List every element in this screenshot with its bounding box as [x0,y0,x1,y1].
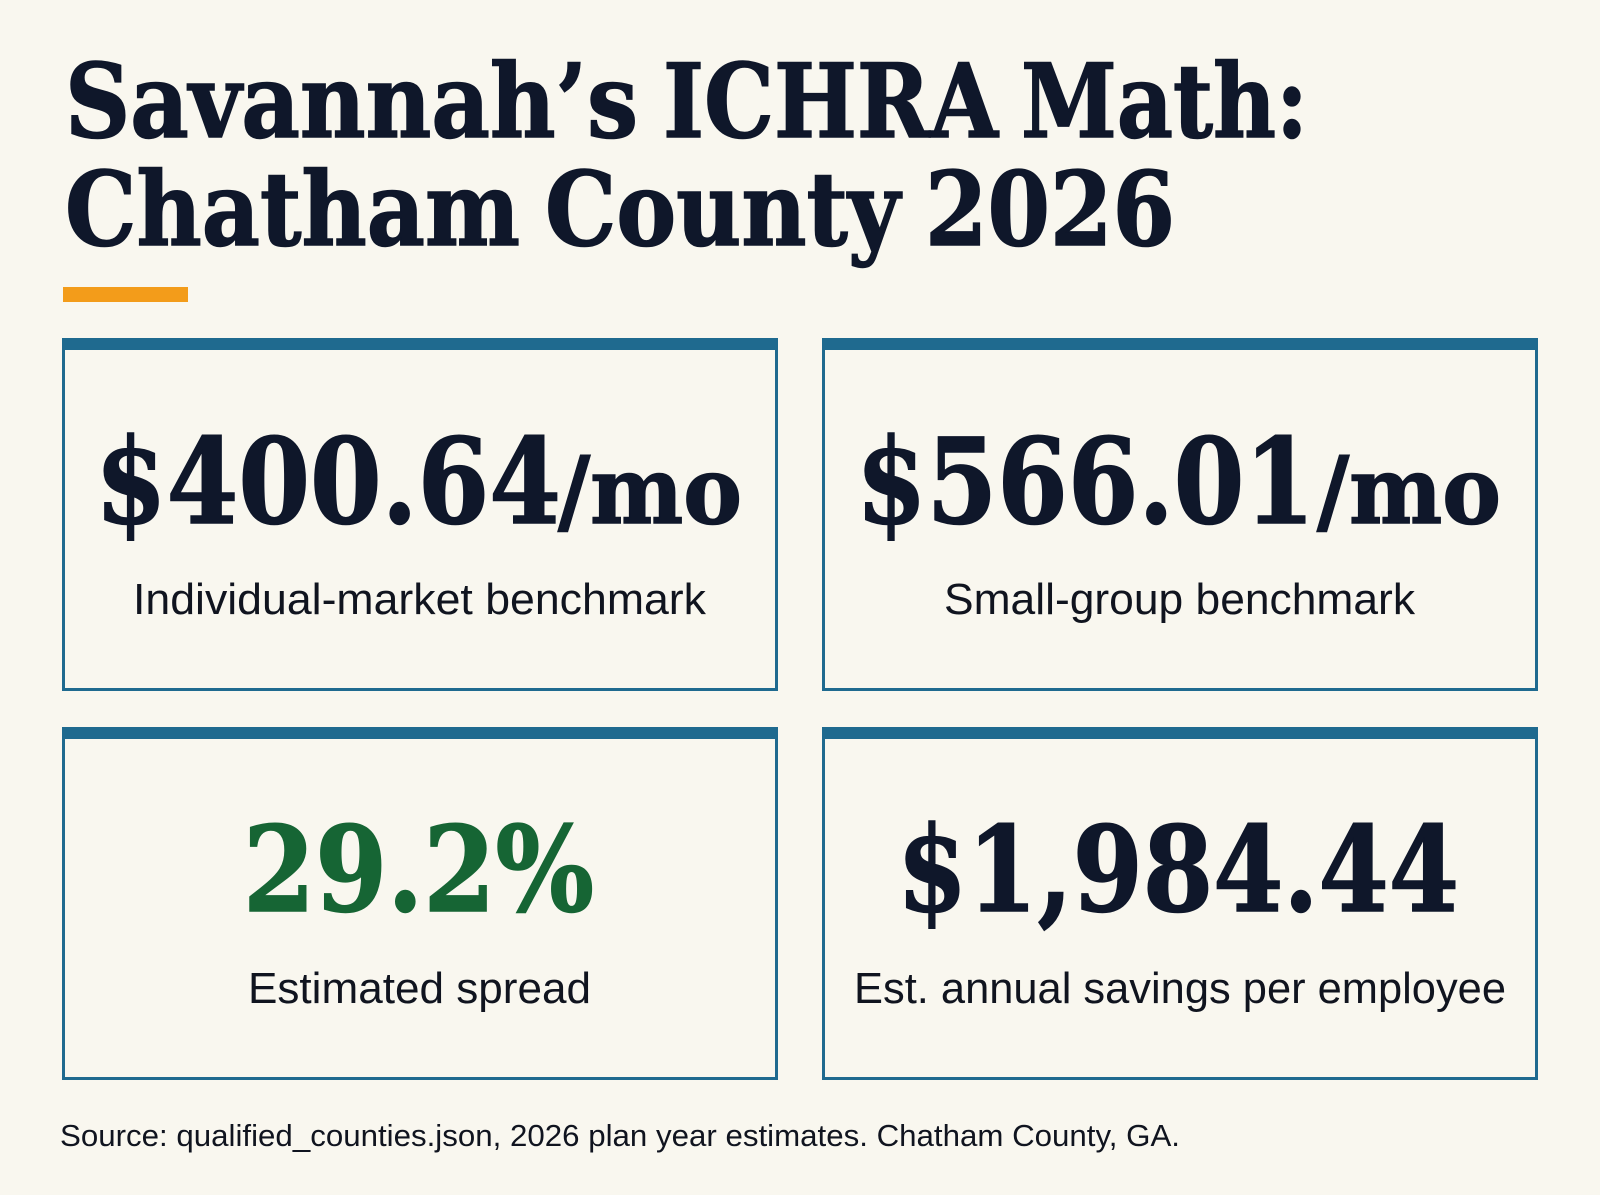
accent bar [63,287,188,302]
value: annual savings: $1,984.44 [897,800,1459,939]
value: small-group benchmark: /mo [1317,436,1501,545]
value: small-group benchmark: $566.01 [856,412,1315,551]
title: Savannah’s [65,42,638,162]
title: Chatham [65,150,520,270]
panel: small-group benchmark [822,338,1538,690]
source note: Source: qualified_counties.json, 2026 plan year estimates. Chatham County, GA. [60,1118,1180,1153]
label: small-group benchmark: Small-group benchmark [944,575,1416,624]
value: individual benchmark: /mo [558,436,742,545]
label: estimated spread: Estimated spread [248,964,591,1013]
value: individual benchmark: $400.64 [95,412,561,551]
title: ICHRA [663,42,1000,162]
panel: individual-market benchmark [62,338,778,690]
panel: annual savings [822,727,1538,1078]
label: annual savings: Est. annual savings per employee [854,964,1506,1013]
title: Math: [1021,42,1308,162]
title: County [545,150,902,270]
title [65,42,1308,270]
panel: estimated spread [62,727,778,1078]
title: 2026 [925,150,1175,270]
label: individual benchmark: Individual-market benchmark [133,575,707,624]
value: estimated spread: 29.2% [243,800,594,939]
